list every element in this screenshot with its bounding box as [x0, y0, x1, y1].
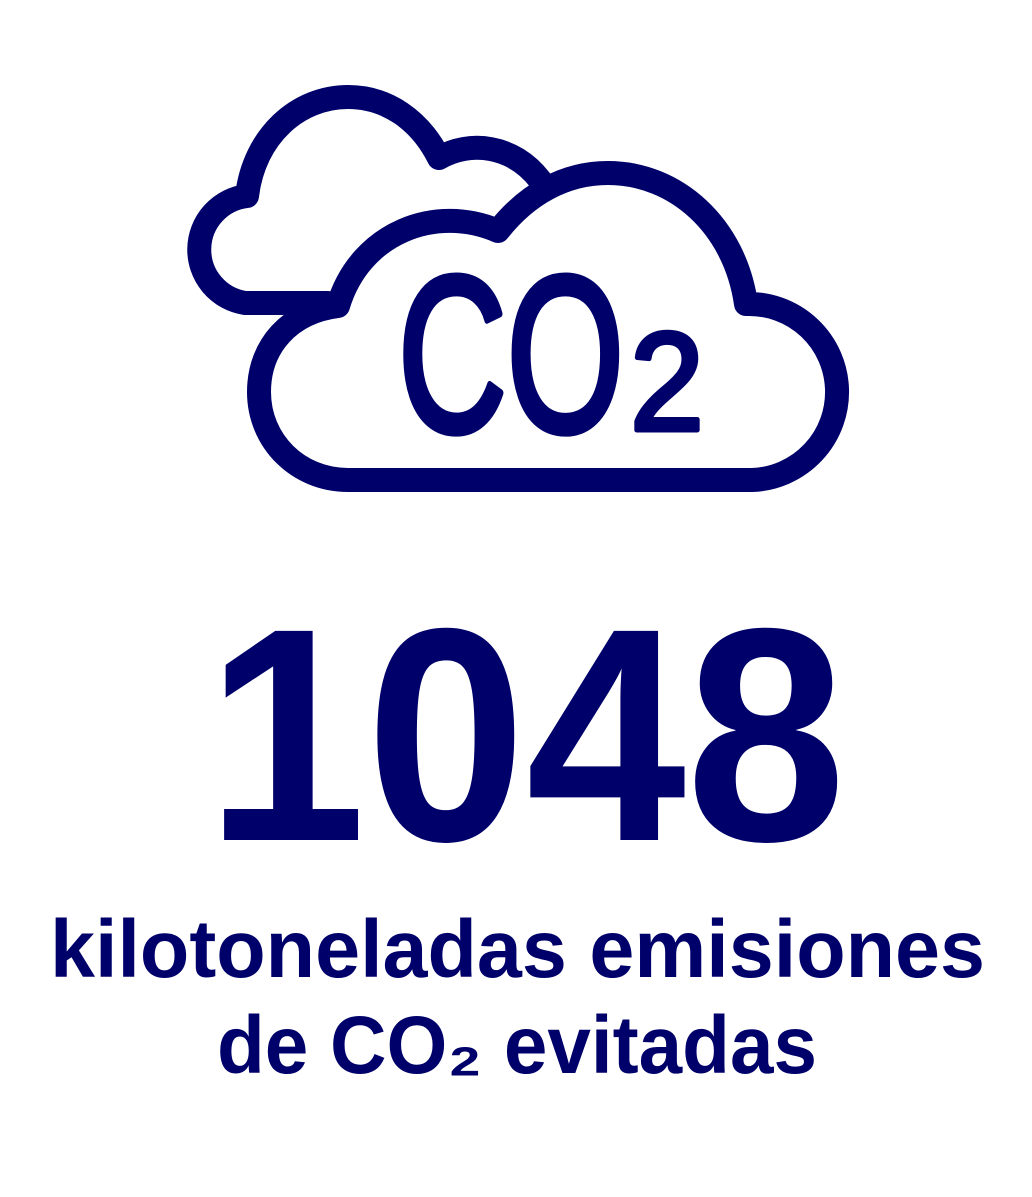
big number: 1048	[206, 566, 846, 905]
icon: front cloud	[259, 173, 837, 480]
icon: CO2 clouds	[199, 97, 837, 480]
icon: CO2 label: CO	[398, 231, 624, 479]
icon: CO2 label: 2	[630, 303, 704, 460]
icon: back cloud	[199, 97, 540, 303]
caption: de CO₂ evitadas	[217, 1000, 817, 1091]
caption: kilotoneladas emisiones	[50, 904, 985, 995]
caption	[50, 904, 985, 1091]
